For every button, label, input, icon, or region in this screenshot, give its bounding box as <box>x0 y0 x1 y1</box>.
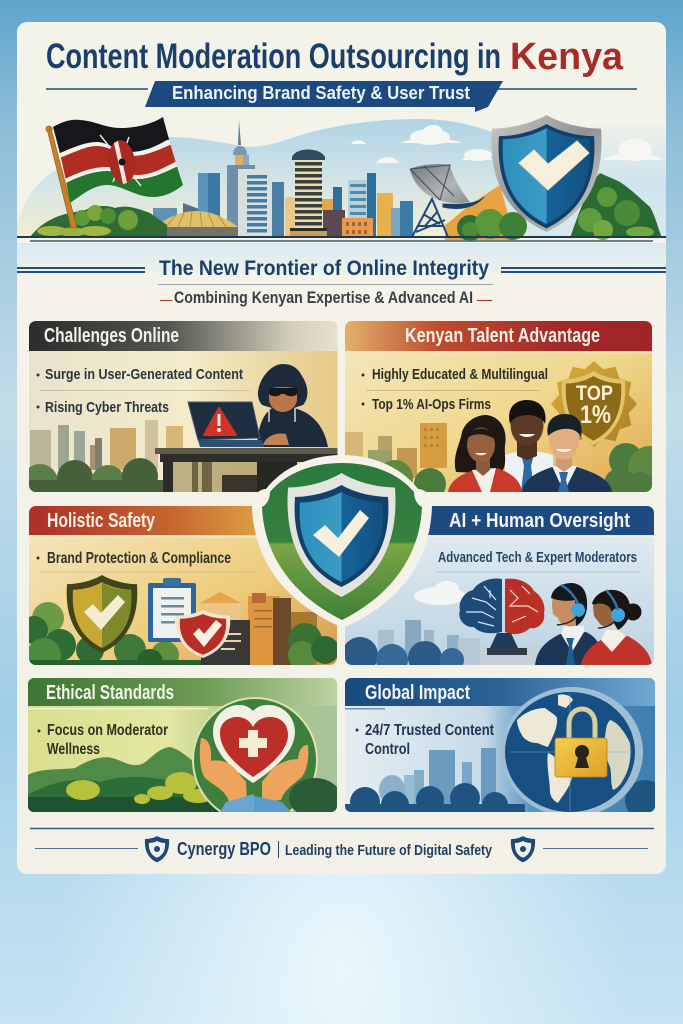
flag emblem <box>100 135 141 186</box>
panel: global impact: Global Impact <box>365 682 470 704</box>
icon: padlock <box>555 709 607 777</box>
icon: clipboard <box>148 578 196 642</box>
dark tree <box>289 778 341 818</box>
section band <box>17 243 666 273</box>
panel: ai + human oversight <box>342 506 654 676</box>
panel: ethical standards <box>28 678 341 822</box>
panel: kenyan talent advantage: Kenyan Talent Advantage <box>405 325 600 347</box>
bullet list <box>362 366 548 413</box>
icon: brain <box>459 579 545 655</box>
footer tagline: Leading the Future of Digital Safety <box>285 842 493 859</box>
bullet list: Rising Cyber Threats <box>45 399 169 416</box>
man centre <box>505 400 553 492</box>
section heading rules <box>17 267 666 273</box>
faded city <box>378 620 540 665</box>
KICC tower <box>290 150 327 237</box>
panel: challenges online <box>22 321 338 500</box>
brand name: Cynergy BPO <box>177 839 271 859</box>
header <box>428 506 654 535</box>
dark document <box>201 620 250 665</box>
circle behind heart <box>193 698 317 822</box>
trees <box>384 443 652 492</box>
desk <box>155 448 338 492</box>
bullet: Brand Protection & Compliance <box>47 550 231 567</box>
flag pole <box>47 128 77 228</box>
cloud <box>414 581 466 605</box>
subtitle ribbon: Enhancing Brand Safety & User Trust <box>172 83 470 103</box>
panel: global impact <box>345 678 665 820</box>
moderator: man <box>535 583 604 665</box>
people <box>448 400 612 492</box>
bullet: Focus on Moderator <box>47 722 168 739</box>
bullet <box>356 722 495 758</box>
hero illustration <box>17 105 666 242</box>
sky and hills <box>17 119 666 238</box>
bullet: 24/7 Trusted Content <box>365 722 495 739</box>
title: Content Moderation Outsourcing in <box>46 37 501 76</box>
panel: holistic safety <box>20 506 339 675</box>
icon: footer shield right <box>511 836 535 862</box>
satellite dish <box>410 164 484 237</box>
bullet: Control <box>365 741 410 758</box>
trees <box>29 602 337 665</box>
header <box>345 678 655 706</box>
subtitle ribbon <box>46 81 637 112</box>
skyline <box>153 120 413 237</box>
section heading: The New Frontier of Online Integrity <box>159 257 489 280</box>
header <box>345 321 652 351</box>
top 1% badge: 1% <box>580 401 611 429</box>
bullet <box>38 722 168 758</box>
bullet list: Top 1% AI-Ops Firms <box>372 396 491 413</box>
icon: footer shield left <box>145 836 169 862</box>
centre emblem <box>252 455 432 628</box>
panel: ai + human oversight: AI + Human Oversight <box>449 510 630 532</box>
ground line <box>17 236 666 242</box>
trees <box>29 458 163 492</box>
icon: globe <box>501 687 643 817</box>
centre shield <box>288 473 395 597</box>
bullet: Wellness <box>47 741 100 758</box>
header <box>29 506 256 535</box>
forest <box>28 747 238 812</box>
skyline <box>200 592 317 665</box>
bullet list: Highly Educated & Multilingual <box>372 366 548 383</box>
icon: olive shield <box>67 575 137 653</box>
title accent: Kenya: Kenya <box>510 36 624 78</box>
top 1% badge <box>551 361 637 447</box>
trees <box>345 780 665 820</box>
bullet list: Surge in User-Generated Content <box>45 366 243 383</box>
hero shield <box>491 115 602 232</box>
warning icon <box>204 408 236 435</box>
icon: red shield <box>176 610 230 658</box>
header <box>28 678 337 706</box>
woman left <box>448 415 522 492</box>
bullet <box>36 550 255 572</box>
hacker <box>257 364 328 447</box>
man right <box>522 414 612 492</box>
background city <box>345 423 447 480</box>
panel: ethical standards: Ethical Standards <box>46 682 174 704</box>
top 1% badge: TOP <box>576 382 613 405</box>
laptop <box>188 402 264 447</box>
left trees <box>30 205 167 237</box>
heading rule <box>158 284 493 286</box>
Kenyan flag <box>53 117 183 203</box>
panel: holistic safety: Holistic Safety <box>47 510 156 532</box>
header <box>29 321 338 351</box>
panel: kenyan talent advantage <box>345 321 652 492</box>
clouds <box>351 125 663 163</box>
faded city <box>379 748 496 805</box>
right trees <box>570 173 662 240</box>
footer <box>30 828 654 862</box>
faded city <box>30 420 183 470</box>
section subheading: Combining Kenyan Expertise & Advanced AI <box>174 288 473 307</box>
moderator: woman <box>581 590 652 665</box>
main card <box>17 22 666 874</box>
bullet list <box>36 366 250 416</box>
panel: challenges online: Challenges Online <box>44 325 179 347</box>
mid trees <box>457 209 527 241</box>
orange hill <box>445 185 515 240</box>
dome <box>153 211 238 237</box>
icon: heart in hands <box>200 705 308 812</box>
trees <box>345 637 464 665</box>
